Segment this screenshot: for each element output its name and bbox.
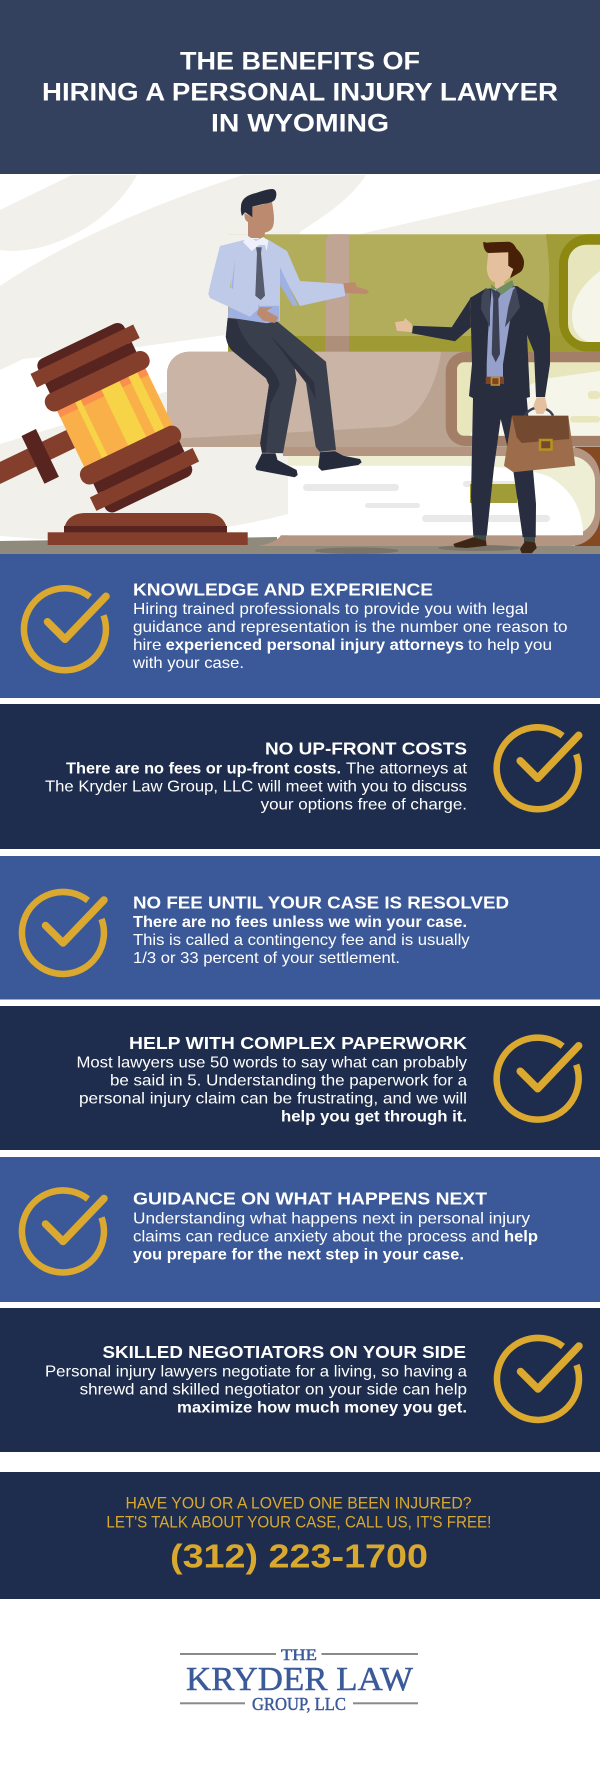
text block: The attorneys at — [346, 760, 468, 777]
text block: hire — [133, 637, 162, 654]
text block: your options free of charge. — [261, 796, 467, 813]
text block: help — [504, 1228, 538, 1245]
panel: no fee until resolved — [0, 856, 600, 1000]
text block: to help you — [468, 637, 552, 654]
text block: There are no fees unless we win your case. — [133, 914, 467, 931]
ground — [0, 537, 600, 554]
icon: check circle — [497, 727, 579, 809]
text block: Most lawyers use 50 words to say what can probably — [76, 1054, 467, 1071]
text block — [133, 893, 509, 967]
text block: be said in 5. Understanding the paperwork for a — [110, 1072, 467, 1089]
text block — [45, 739, 468, 813]
panel: knowledge and experience — [0, 554, 600, 698]
title — [42, 47, 558, 138]
call to action text: LET'S TALK ABOUT YOUR CASE, CALL US, IT'S FREE! — [106, 1514, 491, 1532]
book: olive — [228, 234, 600, 352]
text block — [45, 1342, 467, 1416]
text block: Personal injury lawyers negotiate for a living, so having a — [45, 1363, 467, 1380]
text block — [133, 1189, 538, 1263]
phone number: (312) 223-1700 — [170, 1537, 428, 1574]
text block: maximize how much money you get. — [177, 1399, 467, 1416]
text block: HELP WITH COMPLEX PAPERWORK — [129, 1033, 468, 1053]
text block: you prepare for the next step in your case. — [133, 1246, 464, 1263]
text block: shrewd and skilled negotiator on your side can help — [80, 1381, 467, 1398]
text block: guidance and representation is the number one reason to — [133, 619, 568, 636]
text block: with your case. — [132, 655, 244, 672]
text block: Hiring trained professionals to provide you with legal — [133, 601, 528, 618]
logo: The Kryder Law Group, LLC: KRYDER LAW — [186, 1661, 414, 1698]
figure: seated man — [208, 189, 369, 477]
text block: claims can reduce anxiety about the process and — [133, 1228, 500, 1245]
text block: experienced personal injury attorneys — [166, 637, 464, 654]
figure: standing man with briefcase — [395, 242, 575, 553]
icon: check circle — [497, 1038, 579, 1120]
title: THE BENEFITS OF — [180, 47, 420, 75]
text block: NO FEE UNTIL YOUR CASE IS RESOLVED — [133, 893, 509, 913]
icon: check circle — [22, 892, 104, 974]
book: tan — [167, 352, 600, 447]
text block: personal injury claim can be frustrating, and we will — [79, 1090, 467, 1107]
book: white pages — [258, 447, 600, 546]
call to action text — [106, 1495, 491, 1532]
panel: call to action — [0, 1472, 600, 1599]
logo: The Kryder Law Group, LLC: GROUP, LLC — [252, 1694, 346, 1714]
panel: guidance on what happens next — [0, 1157, 600, 1302]
panel: help with complex paperwork — [0, 1006, 600, 1150]
text block: Understanding what happens next in personal injury — [133, 1210, 530, 1227]
title: IN WYOMING — [211, 110, 389, 138]
text block: There are no fees or up-front costs. — [66, 760, 341, 777]
text block: This is called a contingency fee and is usually — [133, 932, 470, 949]
text block — [132, 580, 568, 672]
icon: gavel — [0, 316, 248, 583]
icon: briefcase — [504, 416, 575, 472]
text block: NO UP-FRONT COSTS — [265, 739, 467, 759]
panel: no up-front costs — [0, 704, 600, 849]
text block: GUIDANCE ON WHAT HAPPENS NEXT — [133, 1189, 488, 1209]
text block: SKILLED NEGOTIATORS ON YOUR SIDE — [102, 1342, 466, 1362]
illustration: lawyers, law books and gavel — [0, 174, 600, 583]
call to action text: HAVE YOU OR A LOVED ONE BEEN INJURED? — [126, 1495, 472, 1513]
icon: check circle — [22, 1190, 104, 1272]
title: HIRING A PERSONAL INJURY LAWYER — [42, 79, 558, 107]
text block: help you get through it. — [281, 1108, 467, 1125]
icon: check circle — [497, 1338, 579, 1420]
shadows — [315, 545, 520, 554]
text block: The Kryder Law Group, LLC will meet with you to discuss — [45, 778, 467, 795]
text block — [76, 1033, 468, 1125]
text block: KNOWLEDGE AND EXPERIENCE — [133, 580, 433, 600]
header banner — [0, 0, 600, 174]
panel: skilled negotiators — [0, 1308, 600, 1452]
logo: The Kryder Law Group, LLC — [180, 1647, 418, 1714]
icon: check circle — [24, 588, 106, 670]
text block: 1/3 or 33 percent of your settlement. — [133, 950, 400, 967]
logo: The Kryder Law Group, LLC: THE — [281, 1647, 317, 1664]
